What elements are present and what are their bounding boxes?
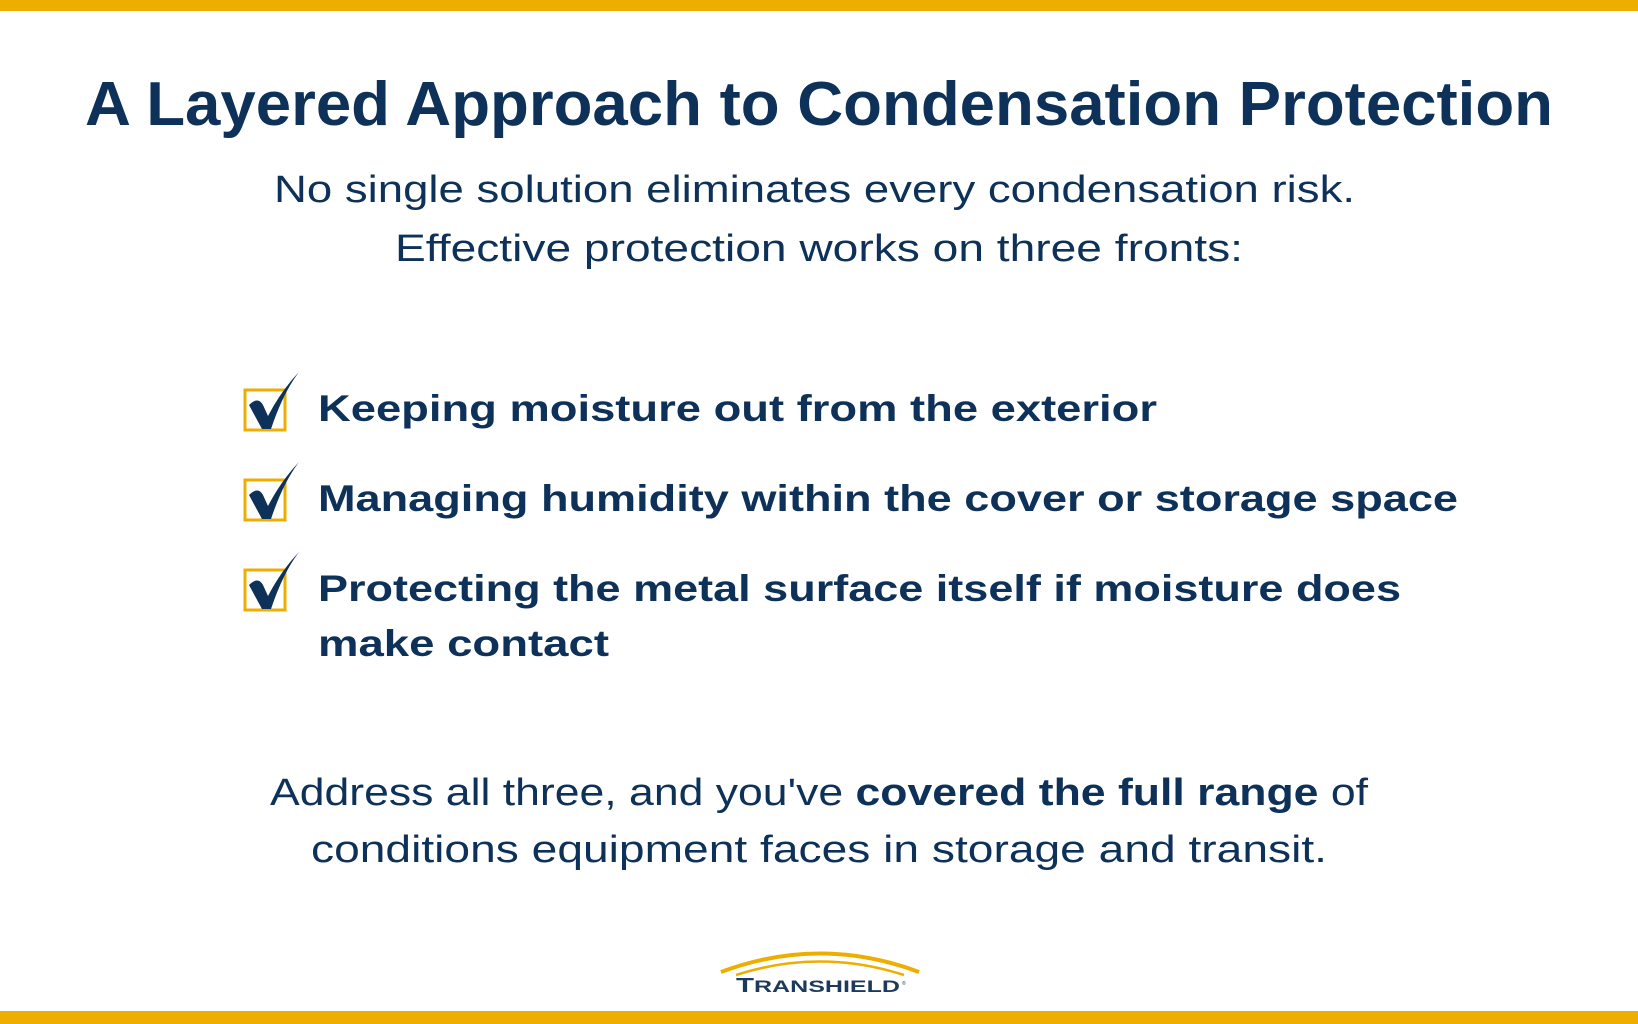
item 3: make contact	[318, 623, 609, 664]
icon: checkbox 1	[245, 372, 299, 430]
closing statement	[270, 772, 1369, 871]
closing statement: conditions equipment faces in storage and transit.	[311, 829, 1327, 871]
subtitle: No single solution eliminates every condensation risk.	[274, 169, 1355, 211]
item 2	[245, 462, 1458, 520]
item 2: Managing humidity within the cover or storage space	[318, 478, 1458, 519]
title: A Layered Approach to Condensation Protection	[85, 70, 1553, 139]
logo: Transhield: T RANSHIELD	[736, 975, 900, 997]
logo: Transhield: ®	[902, 980, 906, 987]
item 1	[245, 372, 1157, 430]
subtitle: Effective protection works on three fronts:	[395, 228, 1243, 270]
icon: checkbox 3	[245, 552, 299, 610]
checklist	[245, 372, 1458, 664]
closing statement: Address all three, and you've covered the full range of	[270, 772, 1369, 814]
icon: checkbox 2	[245, 462, 299, 520]
item 1: Keeping moisture out from the exterior	[318, 388, 1157, 429]
logo: Transhield	[721, 954, 919, 997]
item 3	[245, 552, 1401, 664]
subtitle	[274, 169, 1355, 270]
item 3: Protecting the metal surface itself if moisture does	[318, 568, 1401, 609]
